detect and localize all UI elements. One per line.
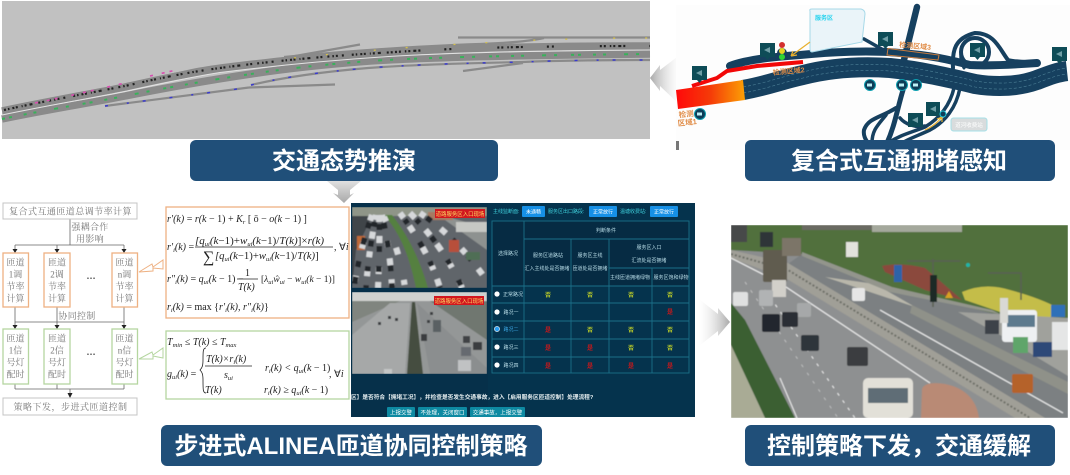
panel: metering rate formulas: ui [266,256,271,263]
panel: signal timing formulas: (k [301,385,310,396]
ramp metering rate boxes: 2调 [50,270,64,280]
flow bottom box [3,398,137,415]
panel: metering rate formulas: (k [209,274,217,285]
panel: signal timing formulas: = [191,369,196,380]
flow label: coupling [71,221,109,244]
panel: signal timing formulas: (k) [177,369,189,380]
table status marks: 否 [667,327,673,334]
forecourt paving [958,312,1068,376]
left verge [731,303,795,418]
panel: metering rate formulas: ŵ [273,275,280,285]
panel: signal timing formulas [166,331,349,399]
table row labels: 路况一 [503,309,519,316]
icon: traffic light [777,42,787,60]
panel: metering rate formulas: o(k − 1) ] [269,214,307,225]
signal pole and gantry [846,242,1065,323]
status buttons: 正常放行 [654,208,674,216]
panel: signal timing formulas: s [224,370,228,381]
ramp signal timing boxes: 配时 [6,368,25,380]
panel: signal timing formulas: i [233,359,235,366]
prompt text: 区】是否符合【拥堵工况】，并检查是否发生交通事故，进入【启用服务区匝道控制】处理流程? [351,393,594,401]
panel: signal timing formulas: (k) ≥ q [270,385,296,396]
panel: signal timing formulas: ui [299,368,304,375]
panel: signal timing formulas: i [268,390,270,397]
panel: metering rate formulas: [q [195,235,220,248]
panel: metering rate formulas: ui [280,279,285,286]
median guard rail [731,250,1045,418]
detection zone labels [677,40,931,128]
table status marks: 否 [628,292,634,299]
status buttons: 主线监断面: [493,208,519,215]
panel: signal timing formulas: ui [172,374,177,381]
heading: 控制策略下发，交通缓解: 控制策略下发，交通缓解 [767,432,1031,460]
decision table: 服务区入口 [636,244,662,251]
panel: metering rate formulas: 1 [245,268,250,279]
panel: metering rate formulas: [q [215,250,238,263]
panel: signal timing formulas: (k [304,363,312,374]
status buttons: 未通畅 [526,208,541,216]
status buttons: 服务区出口路段: [548,208,584,215]
panel: signal timing formulas: T(k) ≤ T [193,337,226,348]
ramp signal timing boxes: 2信 [50,344,64,356]
ramp metering rate boxes: 节率 [115,280,134,292]
upper slip road [788,254,1068,418]
panel: metering rate formulas: − 1) − [219,274,244,285]
ramp metering rate boxes: 节率 [48,280,66,292]
connector lines [15,219,124,397]
panel: metering rate formulas: (k) [173,302,184,313]
arrow: left [650,54,681,106]
panel: signal timing formulas: min [173,342,182,349]
panel: signal timing formulas: g [167,369,189,381]
ramp signal timing boxes: … [86,347,96,357]
panel: metering rate formulas: (k [252,235,262,247]
panel: metering rate formulas: = [189,242,194,253]
heading: 控制策略下发，交通缓解 [745,425,1055,466]
ramp signal timing boxes: 号灯 [48,356,66,368]
panel: signal timing formulas: ui [228,375,233,382]
arrow: right [699,299,730,346]
queued vehicles, light [354,213,485,288]
toll station [951,118,987,131]
ramp metering rate boxes: 计算 [6,292,25,304]
congested upper road [692,62,803,86]
heading: 交通态势推演 [190,140,498,181]
panel: metering rate formulas: r [243,219,246,226]
panel: metering rate formulas: [ ō − [245,214,269,225]
decision table: 服务区道路站 [533,252,563,259]
panel: metering rate formulas: i [225,307,227,314]
arrow: down [327,181,361,203]
yellow flow arrows [791,42,942,130]
photo: congested highway [352,207,487,288]
panel: metering rate formulas: r [167,302,184,314]
panel: control dashboard [351,203,695,417]
panel: metering rate formulas: w [295,274,314,286]
panel: metering rate formulas: (k) [177,274,189,285]
panel: metering rate formulas: } [264,302,269,313]
panel: metering rate formulas: r″ [167,274,189,286]
panel: metering rate formulas: = q [190,274,204,285]
icon: orange lightning connector [139,260,163,272]
panel: metering rate formulas: [λ [261,275,268,285]
decision table: 汇流处是否拥堵 [631,257,667,264]
table row labels: 路况四 [503,362,519,369]
panel: signal timing formulas: (k) [235,354,247,365]
panel: signal timing formulas: (k) < q [271,363,299,374]
table status marks: 是 [545,327,551,334]
panel: metering rate formulas: (k [230,250,238,262]
status buttons [493,206,678,217]
panel: signal timing formulas: T(k) [205,385,222,396]
ramp metering rate boxes: 计算 [48,292,66,304]
panel: metering rate formulas: − 1)] [316,275,335,285]
vehicles [731,225,747,242]
ramp signal timing boxes: 号灯 [6,356,25,368]
panel: metering rate formulas: r′ [167,242,187,254]
ramp signal timing boxes: 配时 [115,368,134,380]
icon: round cameras [694,80,922,120]
table status marks: 是 [545,363,551,370]
table status marks: 是 [667,309,673,316]
panel: metering rate formulas: (k) [253,302,265,313]
decision table: 判断条件 [596,227,616,234]
panel: signal timing formulas: − 1) [311,363,330,374]
trees background [731,225,1068,320]
panel: metering rate formulas: (k) [175,242,187,253]
table status marks: 否 [545,292,551,299]
icon: green lightning connector [139,348,163,359]
flow top box [3,203,137,219]
table status marks: 是 [667,363,673,370]
upper rail [802,252,1000,314]
decision table: 服务区饱和绿物 [653,274,689,281]
arrowheads [12,249,126,398]
panel: metering rate formulas: r′(k) = r(k − 1) + K [167,214,243,225]
ramp metering rate boxes: 匝道 [48,256,66,268]
panel: metering rate formulas [166,207,349,318]
table status marks: 是 [628,363,634,370]
detection zone 3 box [887,48,939,60]
panel: metering rate formulas: (k [271,250,280,262]
ramp signal timing boxes: n信 [118,344,131,356]
panel: metering rate formulas: ui [247,241,253,248]
ramp signal timing boxes: 匝道 [6,332,25,344]
panel: metering rate formulas: (k [306,274,314,285]
ramp signal timing boxes [3,329,138,384]
decision table: 主线匝道拥堵绿物 [610,274,650,281]
panel: metering rate formulas: i [171,307,173,314]
decision table: 汇入主线处是否拥堵 [524,265,570,272]
table status marks [545,292,673,370]
panel: metering rate formulas: − [285,275,295,285]
road network [730,7,1067,146]
table status marks: 是 [587,345,593,352]
ramp signal timing boxes: 匝道 [115,332,134,344]
table status marks: 否 [667,292,673,299]
ramp metering rate boxes: … [86,271,96,281]
service area [810,9,865,52]
table status marks: 否 [628,345,634,352]
panel: metering rate formulas: ui [205,241,210,248]
ramp signal timing boxes: 配时 [48,368,66,380]
panel: signal timing formulas: T [167,337,182,349]
action buttons: 上报交警 [390,408,412,416]
table status marks: 是 [587,363,593,370]
table status marks: 否 [587,292,593,299]
heading: 步进式ALINEA匝道协同控制策略 [161,425,542,466]
ramp metering rate boxes [3,253,138,307]
panel: metering rate formulas: ui [225,256,230,263]
decision table: 服务区主线 [577,252,603,259]
panel: flowchart [3,203,138,415]
panel: metering rate formulas: ∑ [203,249,214,266]
panel: metering rate formulas: ui [301,279,306,286]
flow label: coordination: 协同控制 [58,310,96,321]
icon: cameras [692,32,1067,127]
panel: signal timing formulas: , ∀i [329,369,344,380]
detection zone labels: 检测 [678,108,695,119]
panel: interchange congestion map [676,5,1070,150]
flow label: coupling: 强耦合作 [71,221,109,232]
action buttons: 交通事故，上报交警 [473,408,523,416]
panel: metering rate formulas: −1)/T(k)] [279,250,319,262]
heading: 复合式互通拥堵感知: 复合式互通拥堵感知 [791,147,1007,175]
panel: metering rate formulas: i [251,307,253,314]
simulated road network [2,38,650,119]
photo: highway overview [352,292,487,374]
ramp metering rate boxes: 节率 [6,280,25,292]
decision table: 选择路况 [498,250,518,257]
detection zone labels: 区域1 [677,116,697,128]
table row labels [494,291,523,369]
action buttons [387,407,525,417]
panel: metering rate formulas: −1)+w [238,250,266,262]
photo: congested highway: 道路服务区入口现场 [436,210,485,218]
ramp metering rate boxes: 计算 [115,292,134,304]
table row labels: 路况三 [503,344,519,351]
panel: signal timing formulas: ≤ [182,337,193,348]
ramp signal timing boxes: 1信 [9,344,22,356]
panel: metering rate formulas: −1)+w [218,235,247,247]
table status marks: 否 [587,327,593,334]
panel: signal timing formulas: r [264,385,268,396]
photo: relieved highway traffic [731,225,1068,418]
panel: signal timing formulas: i [269,368,271,375]
panel: metering rate formulas: (k [210,235,220,247]
ramp signal timing boxes: 匝道 [48,332,66,344]
second guard rail [910,305,1068,394]
panel: traffic simulation [2,1,650,139]
congested section gradient [676,80,745,109]
lane lines [731,258,1063,418]
heading: 步进式ALINEA匝道协同控制策略: 步进式ALINEA匝道协同控制策略 [174,433,528,460]
panel: metering rate formulas: , ∀i [334,242,349,253]
panel: signal timing formulas: r [265,363,269,374]
heading: 复合式互通拥堵感知 [745,140,1055,181]
table status marks: 是 [545,345,551,352]
simulated vehicles [2,38,650,119]
table row labels: 路况二 [503,326,519,333]
detection zone labels: 检测区域2 [772,65,805,77]
panel: metering rate formulas: T(k) [238,282,255,293]
flow label: coupling: 用影响 [76,233,104,244]
detection zone labels: 检测区域3 [899,40,931,52]
heading: 交通态势推演: 交通态势推演 [272,147,416,175]
lane markings [743,64,1067,93]
panel: metering rate formulas: (k) [227,302,239,313]
decision table: 匝道处是否拥堵 [572,265,608,272]
panel: metering rate formulas: i [175,279,177,286]
photo: highway overview: 道路服务区入口现场 [435,297,484,305]
decision table [492,221,689,373]
panel: metering rate formulas: , r″ [219,302,265,314]
status buttons: 温塘收费站: [620,208,646,215]
panel: metering rate formulas: ui [268,279,274,286]
action buttons: 不处理，关闭窗口 [420,408,465,416]
toll station: 道河收费站 [955,121,983,129]
table row labels: 正常路况 [503,291,523,298]
ramp metering rate boxes: n调 [118,270,131,280]
flow top box: 复合式互通匝道总调节率计算 [9,206,132,216]
main carriageway [731,257,1045,418]
panel: signal timing formulas: ui [296,390,302,397]
ramp signal timing boxes: 号灯 [115,356,134,368]
status buttons: 正常放行 [593,208,613,216]
ramp metering rate boxes: 匝道 [6,256,25,268]
queued vehicles, dark [352,215,472,288]
panel: metering rate formulas: i [173,247,175,254]
panel: metering rate formulas: −1)/T(k)]×r(k) [261,235,324,247]
panel: signal timing formulas: T(k)×r [206,354,233,365]
panel: signal timing formulas: − 1) [309,385,328,396]
panel: metering rate formulas: = max {r′ [186,302,225,313]
ramp metering rate boxes: 匝道 [115,256,134,268]
table status marks: 否 [628,327,634,334]
gore paving [825,277,915,307]
service area: 服务区 [815,14,833,22]
panel: metering rate formulas: ui [204,279,209,286]
ramp metering rate boxes: 1调 [9,270,22,280]
flow bottom box: 策略下发，步进式匝道控制 [13,401,128,413]
table status marks: 否 [667,345,673,352]
panel: signal timing formulas: max [226,342,236,349]
